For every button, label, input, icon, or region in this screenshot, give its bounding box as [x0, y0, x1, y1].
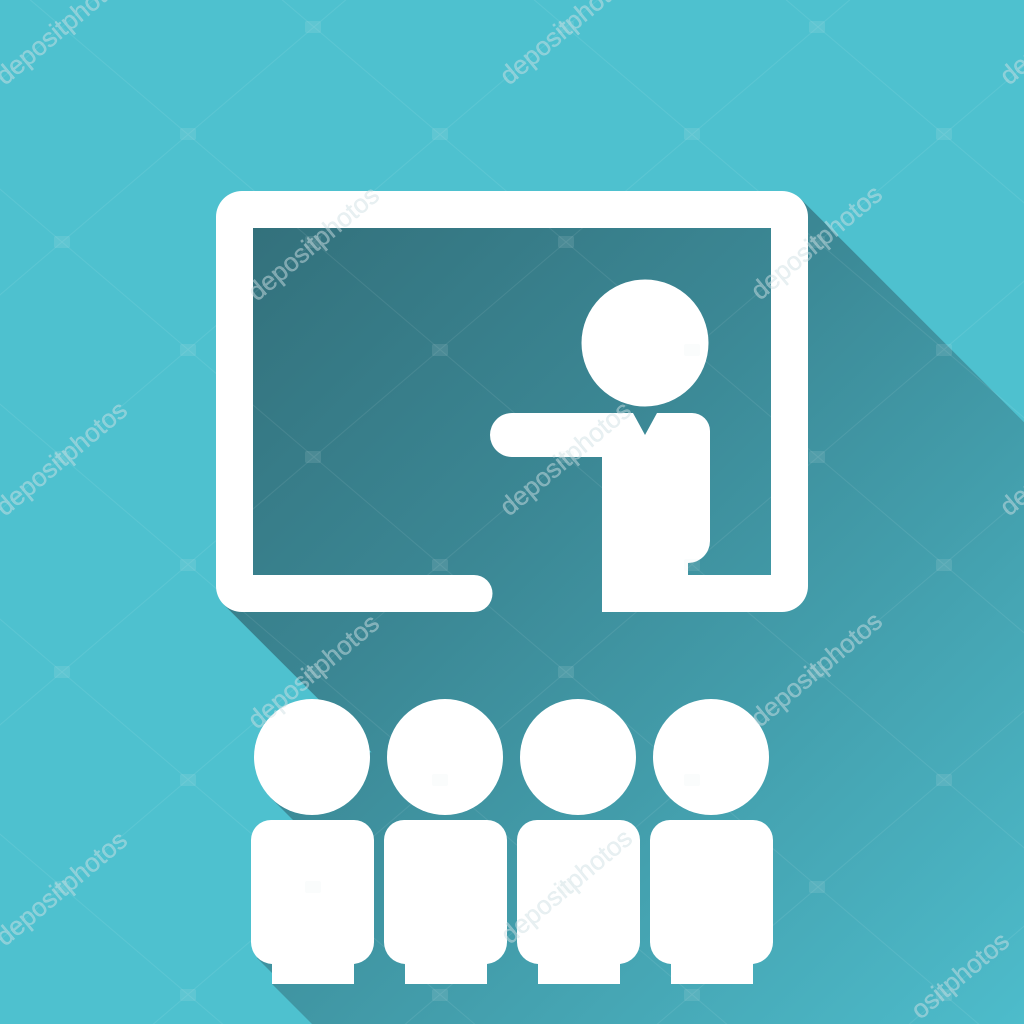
student 4	[650, 699, 773, 984]
watermark text: depositphotos	[495, 823, 638, 950]
watermark text: depositphotos	[494, 395, 637, 522]
watermark text: depositphotos	[242, 180, 385, 307]
watermark text: ositphotos	[905, 926, 1015, 1024]
student 3	[517, 699, 640, 984]
student 1	[251, 699, 374, 984]
long diagonal shadow	[224, 199, 1024, 1024]
watermark text: depositphotos	[242, 608, 385, 735]
student 2	[384, 699, 507, 984]
watermark text: depositphotos	[745, 606, 888, 733]
watermark text: depositphotos	[745, 179, 888, 306]
icon: chalkboard frame	[216, 191, 808, 612]
icon: teacher	[490, 280, 710, 612]
icon: students	[251, 699, 773, 984]
